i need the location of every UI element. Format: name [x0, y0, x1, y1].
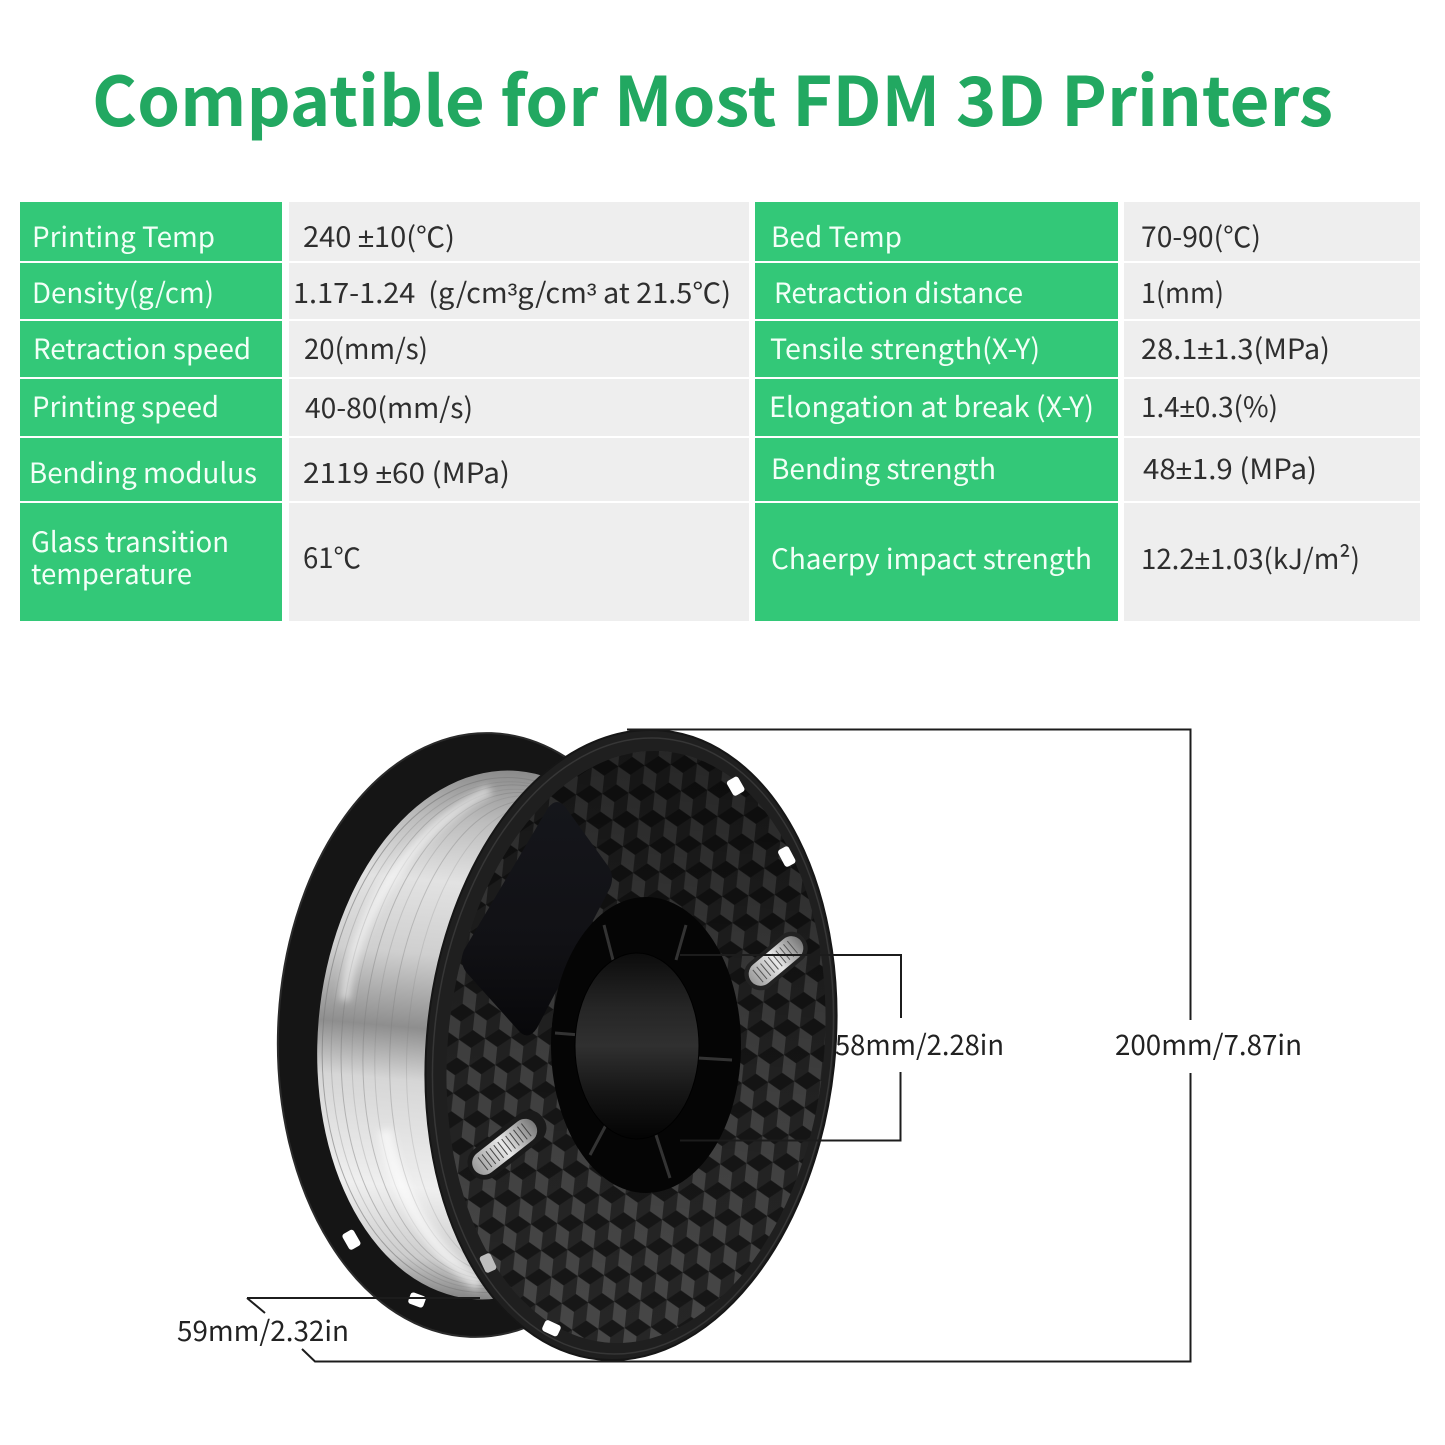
row: retraction speed value: 20(mm/s) — [304, 328, 428, 368]
row: retraction speed label: Retraction speed — [33, 328, 251, 368]
row: elongation label — [755, 379, 1118, 436]
row: elongation value — [1124, 379, 1420, 436]
slot with filament, lower left — [461, 1104, 553, 1186]
row: density label — [20, 263, 282, 319]
row: bending strength value: 48±1.9 (MPa) — [1143, 448, 1317, 488]
row: bending modulus value — [289, 438, 749, 501]
title: Compatible for Most FDM 3D Printers — [92, 47, 1333, 146]
row: retraction speed value — [289, 321, 749, 377]
row: tensile strength label — [755, 321, 1118, 377]
row: printing temp value: 240 ±10(℃) — [303, 216, 455, 256]
carbon-fibre cube pattern — [418, 732, 854, 1362]
inner core barrel — [575, 953, 699, 1139]
row: retraction distance label: Retraction distance — [774, 272, 1023, 312]
row: retraction speed label — [20, 321, 282, 377]
row: retraction distance label — [755, 263, 1118, 319]
row: printing speed value: 40-80(mm/s) — [305, 387, 473, 427]
specification table — [20, 202, 1420, 621]
row: density value — [289, 263, 749, 319]
clear filament winding — [296, 756, 694, 1314]
dimension line: 200mm diameter — [302, 730, 1190, 1362]
row: tensile strength label: Tensile strength(X-Y) — [770, 328, 1040, 368]
dimension line: 59mm width — [247, 1298, 480, 1313]
row: bed temp value: 70-90(℃) — [1141, 216, 1261, 256]
spool front flange — [395, 709, 867, 1381]
row: bending modulus label: Bending modulus — [29, 452, 257, 492]
row: glass transition label: Glass transition — [31, 521, 229, 561]
slot with filament, upper right — [738, 926, 814, 996]
row: bending strength label: Bending strength — [771, 448, 996, 488]
row: retraction distance value — [1124, 263, 1420, 319]
row: glass transition value: 61℃ — [303, 537, 361, 577]
row: density value: 1.17-1.24 (g/cm³g/cm³ at 21.5℃) — [293, 272, 731, 312]
row: printing temp label: Printing Temp — [32, 216, 215, 256]
back flange mounting notches — [341, 1229, 427, 1308]
row: elongation label: Elongation at break (X-Y) — [769, 386, 1094, 426]
row: bed temp label — [755, 202, 1118, 261]
row: bending modulus label — [20, 438, 282, 501]
dimension label: 59mm: 59mm/2.32in — [177, 1310, 349, 1350]
row: bed temp label: Bed Temp — [771, 216, 902, 256]
row: charpy impact value: 12.2±1.03(kJ/m²) — [1141, 538, 1360, 578]
row: bed temp value — [1124, 202, 1420, 261]
row: bending strength label — [755, 438, 1118, 501]
row: bending modulus value: 2119 ±60 (MPa) — [303, 452, 510, 492]
dimension label: 58mm: 58mm/2.28in — [835, 1024, 1004, 1064]
row: charpy impact label: Chaerpy impact strength — [771, 538, 1092, 578]
front flange mounting notches — [479, 776, 797, 1337]
row: glass transition label: temperature — [31, 553, 192, 593]
row: bending strength value — [1124, 438, 1420, 501]
dimension label: 200mm: 200mm/7.87in — [1115, 1024, 1302, 1064]
row: charpy impact value — [1124, 503, 1420, 621]
row: glass transition value — [289, 503, 749, 621]
row: density label: Density(g/cm) — [32, 272, 214, 312]
filament spool — [268, 709, 867, 1381]
spool back flange — [268, 726, 694, 1344]
central hub opening — [551, 897, 741, 1193]
row: glass transition label — [20, 503, 282, 621]
row: tensile strength value — [1124, 321, 1420, 377]
dimension line: 58mm hub — [680, 955, 901, 1140]
row: printing temp label — [20, 202, 282, 261]
row: printing speed label — [20, 379, 282, 436]
row: printing speed value — [289, 379, 749, 436]
row: printing speed label: Printing speed — [32, 386, 219, 426]
black label area — [462, 802, 612, 1036]
row: retraction distance value: 1(mm) — [1141, 272, 1224, 312]
row: tensile strength value: 28.1±1.3(MPa) — [1141, 328, 1330, 368]
row: elongation value: 1.4±0.3(%) — [1141, 386, 1278, 426]
row: charpy impact label — [755, 503, 1118, 621]
row: printing temp value — [289, 202, 749, 261]
